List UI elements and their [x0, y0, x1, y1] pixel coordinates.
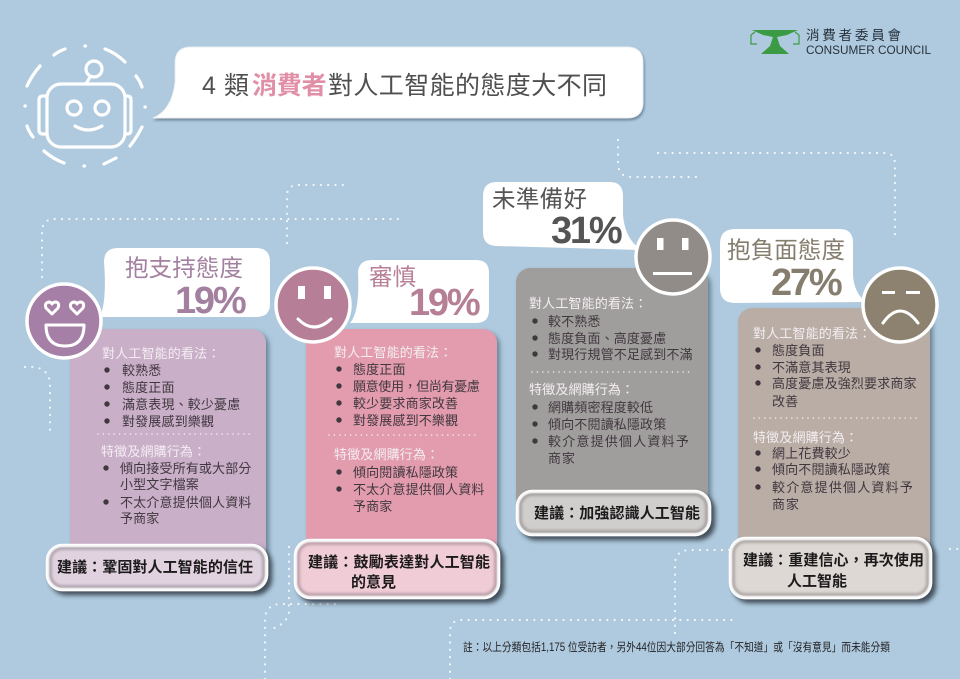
- recommendation badge: [48, 546, 266, 590]
- percentage: 27%: [771, 262, 842, 304]
- panel: supportive 19%: [27, 248, 270, 590]
- speech bubble: [720, 229, 866, 303]
- speech bubble: [350, 260, 489, 323]
- panel: negative 27%: 傾向不閱讀私隱政策: [772, 462, 890, 477]
- heading: 審慎: [369, 264, 416, 290]
- face icon: frown: [863, 268, 937, 342]
- panel: unprepared 31%: 網購頻密程度較低: [548, 400, 653, 415]
- panel: cautious 19%: 不太介意提供個人資料: [353, 482, 485, 497]
- heading: 抱支持態度: [125, 255, 243, 281]
- card: [516, 268, 708, 513]
- title: 4: [202, 72, 216, 100]
- title speech bubble: [153, 47, 643, 118]
- text: online behaviour: 特徵及網購行為：: [753, 430, 858, 445]
- face icon: heart eyes: [27, 284, 101, 358]
- heading: 抱負面態度: [727, 237, 845, 263]
- panel: supportive 19%: 態度正面: [122, 380, 175, 395]
- recommendation text: 人工智能: [787, 572, 847, 590]
- recommendation badge: [730, 538, 930, 598]
- panel: cautious 19%: 對發展感到不樂觀: [353, 413, 458, 428]
- logo English name: CONSUMER COUNCIL: [806, 43, 931, 57]
- panel: supportive 19%: 滿意表現、較少憂慮: [122, 397, 240, 412]
- face icon: smile: [276, 268, 350, 342]
- panel: unprepared 31%: 對現行規管不足感到不滿: [548, 347, 693, 362]
- card: [70, 329, 266, 564]
- title: 類: [224, 72, 249, 100]
- recommendation badge: [296, 540, 498, 598]
- percentage: 31%: [551, 210, 622, 252]
- percentage: 19%: [175, 280, 246, 322]
- panel: negative 27%: 態度負面: [772, 343, 825, 358]
- panel: negative 27%: 商家: [772, 497, 799, 512]
- panel: cautious 19%: 態度正面: [353, 362, 406, 377]
- face icon: neutral: [636, 220, 710, 294]
- panel: supportive 19%: 予商家: [120, 511, 159, 526]
- card: [738, 308, 930, 563]
- panel: cautious 19%: 較少要求商家改善: [353, 396, 458, 411]
- panel: supportive 19%: 傾向接受所有或大部分: [120, 461, 252, 476]
- percentage: 19%: [409, 282, 480, 324]
- panel: unprepared 31%: [483, 182, 710, 534]
- heading: 未準備好: [492, 186, 587, 212]
- panel: cautious 19%: 願意使用，但尚有憂慮: [353, 379, 480, 394]
- panel: negative 27%: 高度憂慮及強烈要求商家: [772, 376, 917, 391]
- panel: unprepared 31%: 較介意提供個人資料予: [548, 434, 689, 449]
- speech bubble: [483, 182, 642, 250]
- recommendation text: [308, 553, 490, 591]
- panel: supportive 19%: 小型文字檔案: [120, 477, 199, 492]
- panel: negative 27%: 不滿意其表現: [772, 360, 851, 375]
- title: 消費者: [252, 72, 326, 100]
- panel: negative 27%: 網上花費較少: [772, 446, 851, 461]
- text: views on AI: 對人工智能的看法：: [102, 346, 220, 361]
- panel: negative 27%: [720, 229, 937, 598]
- panel: negative 27%: 較介意提供個人資料予: [772, 480, 913, 495]
- recommendation text: 建議：鞏固對人工智能的信任: [57, 558, 253, 576]
- recommendation text: 建議：加強認識人工智能: [534, 504, 700, 522]
- text: online behaviour: 特徵及網購行為：: [529, 382, 634, 397]
- recommendation text: 的意見: [351, 573, 396, 591]
- panel: cautious 19%: 傾向閱讀私隱政策: [353, 465, 458, 480]
- text: views on AI: 對人工智能的看法：: [334, 345, 452, 360]
- panel: negative 27%: 改善: [772, 394, 798, 409]
- dotted connector lines: [25, 140, 960, 679]
- panel: unprepared 31%: 傾向不閱讀私隱政策: [548, 417, 666, 432]
- panel: unprepared 31%: 態度負面、高度憂慮: [548, 331, 666, 346]
- icon: robot: [25, 46, 145, 166]
- recommendation text: 建議：重建信心，再次使用: [743, 551, 924, 569]
- footnote: 註：以上分類包括1,175 位受訪者，另外44位因大部分回答為「不知道」或「沒有意見」而未能分類: [463, 640, 890, 654]
- panel: unprepared 31%: 較不熟悉: [548, 314, 601, 329]
- text: online behaviour: 特徵及網購行為：: [101, 444, 206, 459]
- title: 對人工智能的態度大不同: [328, 72, 607, 100]
- panel: cautious 19%: 予商家: [353, 499, 392, 514]
- panel: unprepared 31%: 商家: [548, 451, 575, 466]
- panel: supportive 19%: 對發展感到樂觀: [122, 414, 214, 429]
- recommendation badge: [518, 492, 710, 534]
- text: views on AI: 對人工智能的看法：: [529, 296, 647, 311]
- logo Chinese name: 消費者委員會: [806, 28, 902, 43]
- recommendation text: [743, 551, 924, 590]
- text: views on AI: 對人工智能的看法：: [753, 326, 871, 341]
- panel: supportive 19%: 不太介意提供個人資料: [120, 495, 252, 510]
- speech bubble: [100, 248, 270, 317]
- text: online behaviour: 特徵及網購行為：: [334, 447, 439, 462]
- logo: Consumer Council: [751, 28, 931, 57]
- card: [306, 329, 497, 574]
- panel: cautious 19%: [276, 260, 498, 598]
- recommendation text: 建議：鼓勵表達對人工智能: [308, 553, 490, 571]
- panel: supportive 19%: 較熟悉: [122, 363, 161, 378]
